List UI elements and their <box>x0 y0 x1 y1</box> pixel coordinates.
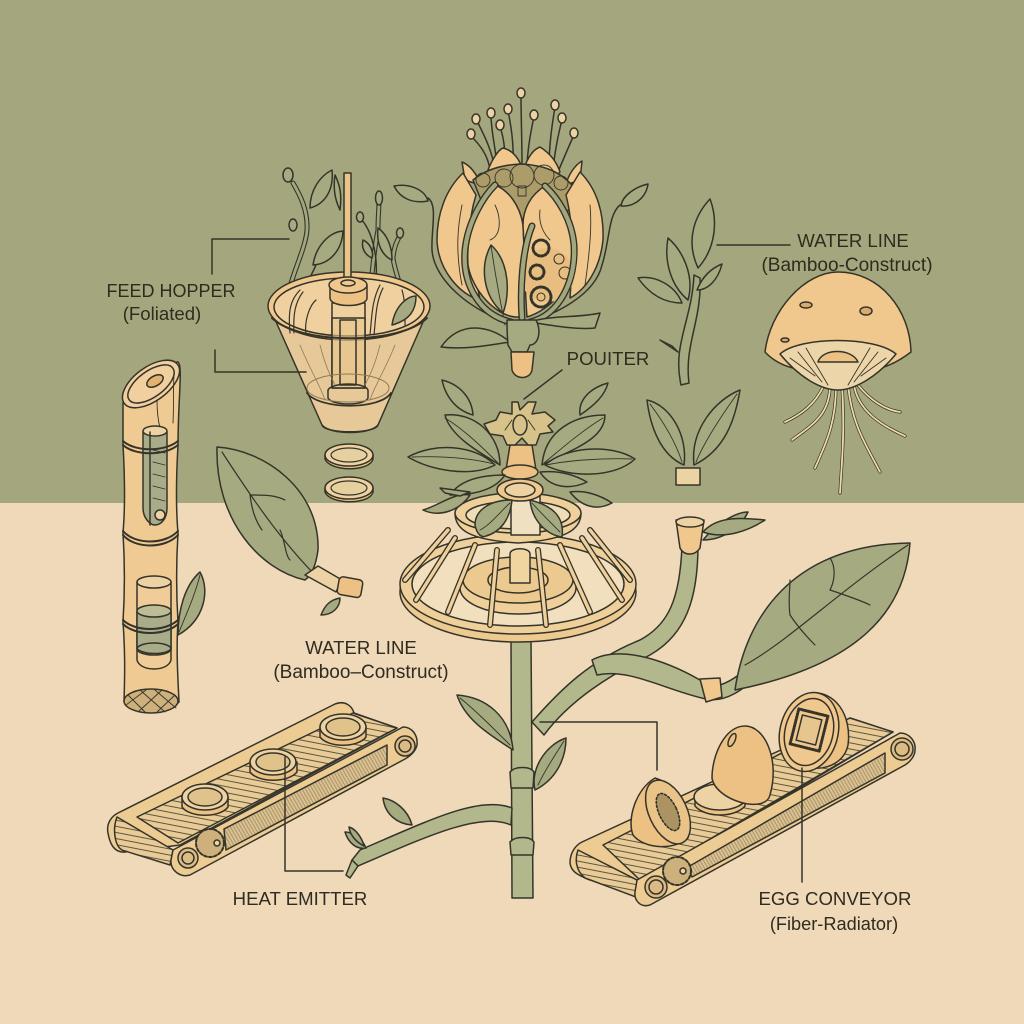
front petals <box>468 185 524 317</box>
rings <box>182 714 366 815</box>
spokes <box>405 530 630 625</box>
rear petals <box>462 161 582 185</box>
label: bamboo construct upper: (Bamboo-Construct) <box>761 255 933 276</box>
circuit egg <box>810 693 849 768</box>
small bud <box>676 468 700 485</box>
column <box>511 490 540 535</box>
back rail <box>108 703 397 852</box>
label: egg conveyor: EGG CONVEYOR <box>759 888 911 909</box>
front rail <box>171 727 417 876</box>
lower disc <box>460 562 576 614</box>
front face of belt <box>115 817 173 865</box>
label: water line upper: WATER LINE <box>797 230 909 251</box>
illustration: central flower bud <box>394 88 648 378</box>
label: heat emitter: HEAT EMITTER <box>233 888 367 909</box>
label: fiber radiator: (Fiber-Radiator) <box>770 914 898 934</box>
gear <box>663 857 691 885</box>
hopper cone <box>269 306 430 432</box>
illustration: loose leaf and bamboo tube joint <box>217 447 363 615</box>
gears on petal <box>520 240 574 307</box>
gear head <box>484 402 555 445</box>
green sepals <box>465 185 511 322</box>
tube body <box>123 362 180 710</box>
illustration: tray feeder <box>400 445 636 642</box>
outer petals <box>437 173 480 300</box>
illustration: mushroom jellyfish <box>765 272 911 493</box>
tray rim <box>400 542 636 642</box>
front rail <box>635 733 915 906</box>
leader lines: feed hopper <box>212 239 306 372</box>
gear <box>196 829 224 857</box>
illustration: right conveyor with eggs <box>570 686 915 906</box>
calyx leaves <box>441 328 510 348</box>
illustration: central stem with branches <box>345 512 910 898</box>
label: bamboo construct lower: (Bamboo–Construct) <box>273 662 449 683</box>
window <box>224 745 387 850</box>
loose rings <box>325 444 373 502</box>
sprigs beside flower <box>428 198 620 322</box>
front face of belt <box>576 850 637 897</box>
side leaf <box>178 572 205 635</box>
illustration: left conveyor <box>108 703 417 876</box>
pulleys <box>891 738 913 760</box>
mesh base <box>124 689 178 713</box>
pulleys <box>395 736 415 756</box>
lower inner tube <box>137 582 171 669</box>
hub <box>455 513 581 543</box>
center block <box>510 549 530 583</box>
leader line: egg conveyor top <box>540 722 657 770</box>
illustration: feed hopper <box>268 168 430 502</box>
calyx base <box>507 320 539 352</box>
label: foliated: (Foliated) <box>123 303 201 324</box>
leader line: pouiter <box>524 370 562 399</box>
stamens <box>467 88 578 172</box>
left twig <box>352 804 512 866</box>
bamboo node rings <box>123 441 178 633</box>
belt surface <box>603 718 893 880</box>
large leaf <box>735 543 910 690</box>
stem leaves <box>457 695 513 750</box>
front rim arc <box>272 318 427 338</box>
slanted cap <box>114 351 188 417</box>
background: cream lower band <box>0 503 1024 1024</box>
belt surface <box>137 713 397 843</box>
halved egg <box>631 778 689 847</box>
leader line: egg conveyor <box>801 768 803 882</box>
hopper column <box>332 303 365 388</box>
hopper vines behind <box>283 168 406 330</box>
label: water line lower: WATER LINE <box>305 637 417 658</box>
label: feed hopper: FEED HOPPER <box>106 281 236 301</box>
roots <box>785 385 905 493</box>
label: pouiter: POUITER <box>567 348 649 369</box>
background: olive upper band <box>0 0 1024 503</box>
back rail <box>570 718 893 880</box>
long branch <box>592 654 762 700</box>
petal veins <box>458 205 591 285</box>
main stem <box>511 640 533 898</box>
front leaves <box>475 500 512 537</box>
right branch <box>532 545 698 735</box>
window <box>688 753 885 877</box>
ring under egg <box>695 798 745 815</box>
inner leaf <box>484 245 507 313</box>
inner seed texture <box>473 164 572 220</box>
upper inner tube <box>143 427 167 525</box>
internal vines <box>289 285 405 335</box>
whole egg <box>712 726 773 804</box>
illustration: bamboo sprig upper right <box>638 199 740 485</box>
illustration: leaf cluster and gear <box>408 380 635 537</box>
leader line: heat emitter <box>285 757 343 871</box>
illustration: bamboo tube <box>114 351 205 713</box>
leader line: water line upper <box>717 244 790 246</box>
